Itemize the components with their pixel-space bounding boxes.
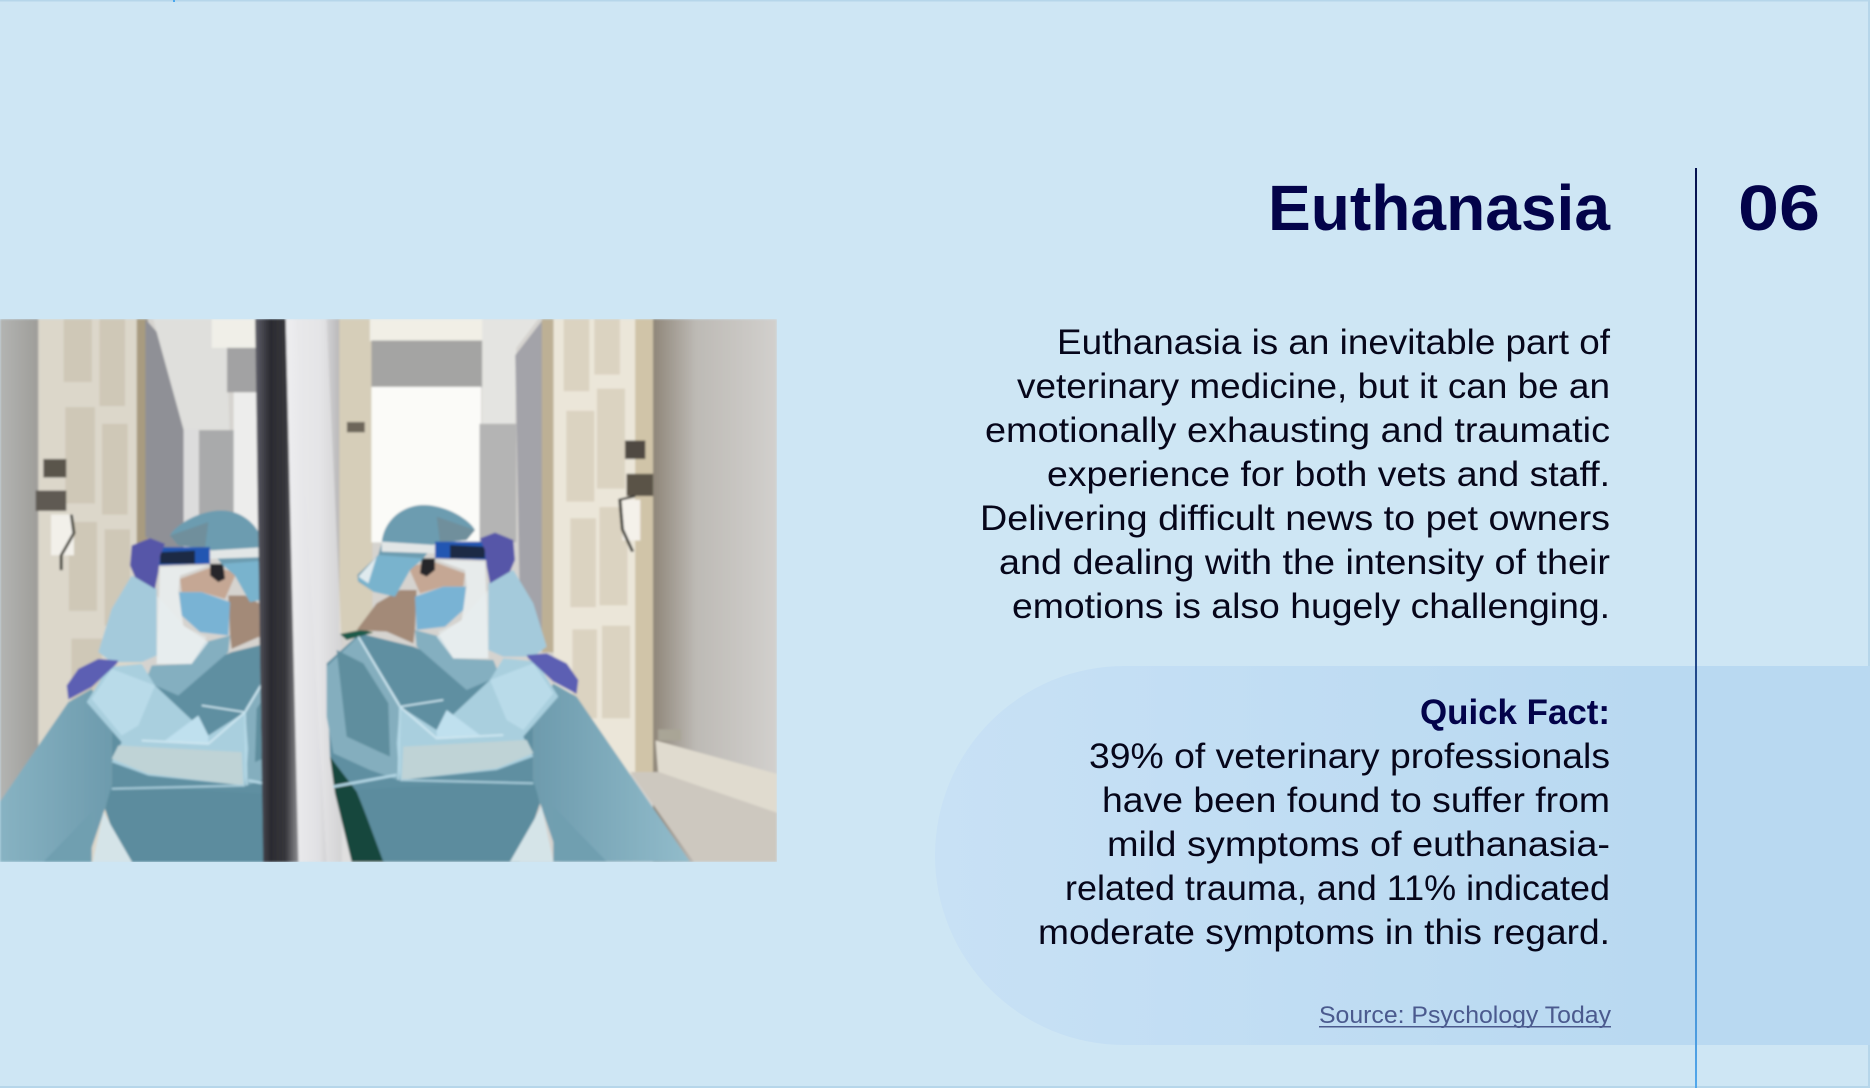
- body paragraph: Euthanasia is an inevitable part of: [1057, 323, 1610, 362]
- body paragraph: [980, 323, 1610, 626]
- body paragraph: and dealing with the intensity of their: [999, 543, 1610, 582]
- body paragraph: experience for both vets and staff.: [1047, 455, 1610, 494]
- quick fact text: 39% of veterinary professionals: [1089, 737, 1610, 776]
- divider line: [1695, 168, 1697, 1088]
- body paragraph: emotions is also hugely challenging.: [1012, 587, 1610, 626]
- quick fact text: mild symptoms of euthanasia-: [1107, 825, 1610, 864]
- body paragraph: veterinary medicine, but it can be an: [1017, 367, 1610, 406]
- quick fact text: [1038, 693, 1610, 952]
- body paragraph: Delivering difficult news to pet owners: [980, 499, 1610, 538]
- photo: veterinary worker sitting in hallway beside a mirror: [0, 319, 777, 867]
- source link: Source: Psychology Today: [1319, 1002, 1611, 1029]
- quick fact text: moderate symptoms in this regard.: [1038, 913, 1610, 952]
- panel: quick fact background: [935, 666, 1870, 1045]
- title: Euthanasia: [1268, 172, 1610, 244]
- quick fact text: have been found to suffer from: [1102, 781, 1610, 820]
- section number: 06: [1738, 172, 1820, 244]
- quick fact text: related trauma, and 11% indicated: [1065, 869, 1610, 908]
- quick fact text: Quick Fact:: [1420, 693, 1610, 732]
- body paragraph: emotionally exhausting and traumatic: [985, 411, 1610, 450]
